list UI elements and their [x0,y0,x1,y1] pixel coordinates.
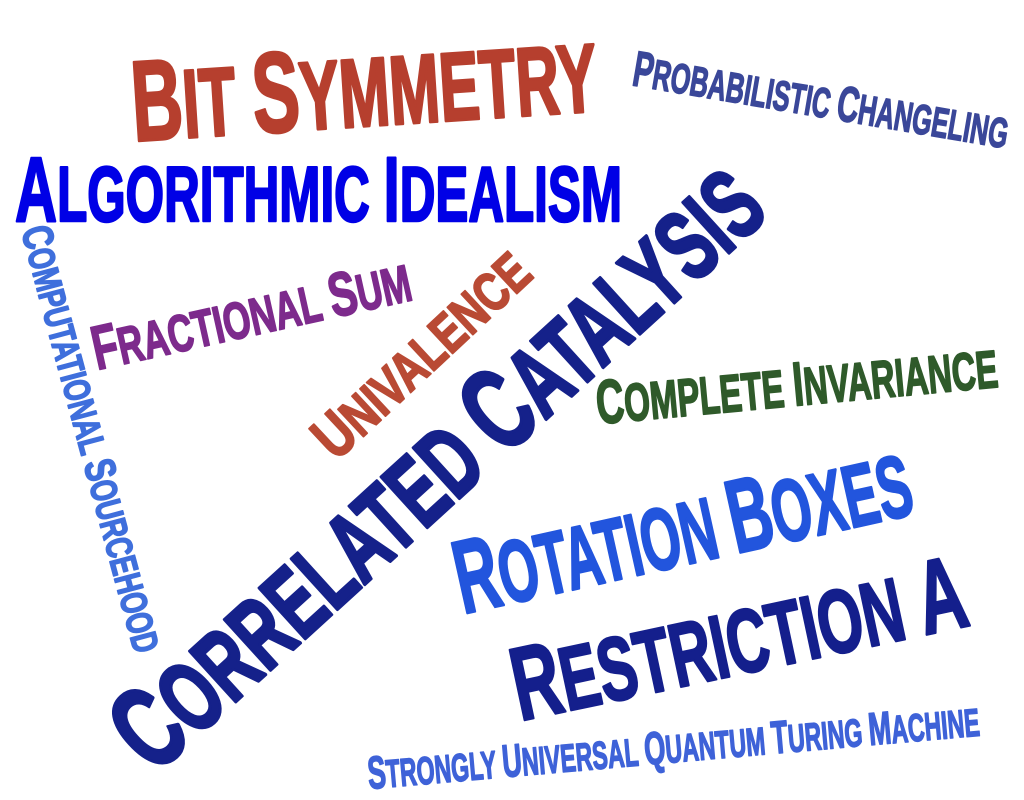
word: Strongly Universal Quantum Turing Machine: STRONGLY UNIVERSAL QUANTUM TURING MACHINE [365,694,982,799]
word: Algorithmic Idealism: ALGORITHMIC IDEALISM [15,139,622,241]
word: Correlated Catalysis: CORRELATED CATALYSIS [83,137,788,794]
word: Fractional Sum: FRACTIONAL SUM [85,246,417,384]
word: Rotation Boxes: ROTATION BOXES [443,423,922,636]
word: Computational Sourcehood: COMPUTATIONAL SOURCEHOOD [11,220,172,658]
word: Bit Symmetry: BIT SYMMETRY [127,9,601,166]
word: Univalence: UNIVALENCE [298,236,544,472]
